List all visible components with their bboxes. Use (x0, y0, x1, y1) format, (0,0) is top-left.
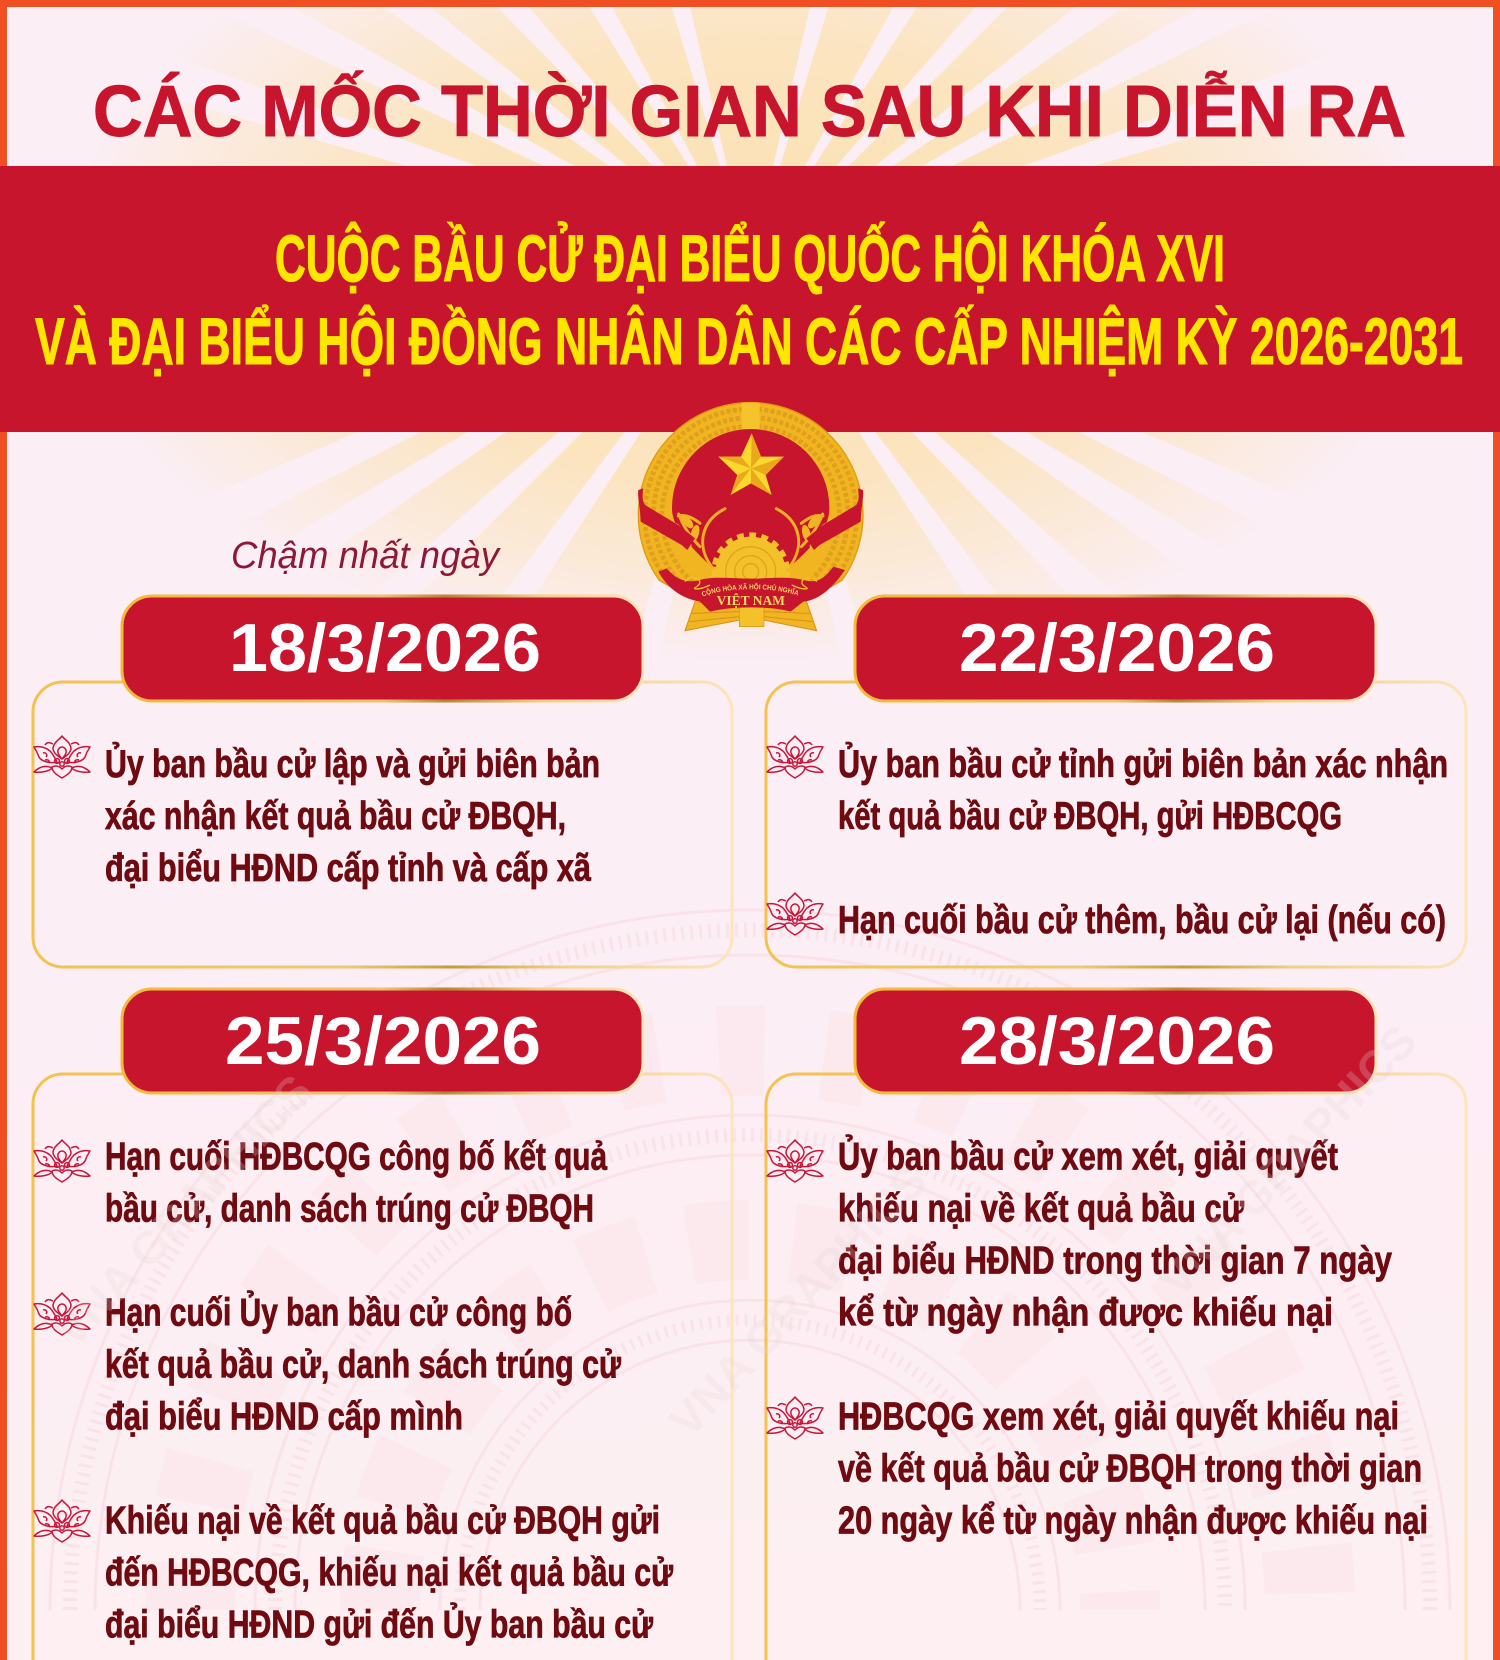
item text: kết quả bầu cử, danh sách trúng cử (105, 1344, 622, 1386)
item text: đại biểu HĐND cấp mình (105, 1396, 463, 1438)
watermark text: VNA GRAPHICS (659, 1155, 937, 1447)
panel frame (33, 682, 732, 967)
item text: Hạn cuối Ủy ban bầu cử công bố (105, 1290, 572, 1334)
panel: 22/3/2026 (766, 596, 1466, 967)
item text (105, 1136, 607, 1230)
icon: lotus (34, 1293, 90, 1335)
date: 22/3/2026 (959, 610, 1275, 686)
item text (838, 1134, 1392, 1334)
date pill (855, 596, 1376, 701)
panel frame (766, 682, 1466, 967)
date: 25/3/2026 (225, 1003, 541, 1079)
item text: xác nhận kết quả bầu cử ĐBQH, (105, 795, 566, 838)
icon: national emblem (638, 402, 864, 632)
item text: đến HĐBCQG, khiếu nại kết quả bầu cử (105, 1552, 674, 1594)
item text: kết quả bầu cử ĐBQH, gửi HĐBCQG (838, 795, 1342, 838)
item text (838, 742, 1448, 838)
date: 28/3/2026 (959, 1003, 1275, 1079)
panel: 18/3/2026 (33, 596, 732, 967)
sunburst background (0, 0, 1500, 1142)
item text (105, 1290, 622, 1438)
item text: Khiếu nại về kết quả bầu cử ĐBQH gửi (105, 1500, 660, 1542)
date pill (122, 989, 643, 1093)
item text: Ủy ban bầu cử lập và gửi biên bản (105, 742, 600, 786)
item text: đại biểu HĐND gửi đến Ủy ban bầu cử (105, 1602, 654, 1646)
red banner with subtitle (0, 166, 1500, 432)
icon: lotus (767, 893, 823, 935)
watermark: bronze drum pattern (50, 910, 1450, 1610)
watermark text (44, 1015, 1427, 1447)
item text (105, 1500, 674, 1646)
icon: lotus (34, 1140, 90, 1182)
item text: Hạn cuối HĐBCQG công bố kết quả (105, 1136, 607, 1178)
icon: lotus (34, 736, 90, 778)
title: CÁC MỐC THỜI GIAN SAU KHI DIỄN RA (93, 70, 1406, 152)
date: 18/3/2026 (229, 610, 541, 686)
panel frame (766, 1074, 1466, 1660)
icon: lotus (767, 1140, 823, 1182)
panel: 25/3/2026 (33, 989, 732, 1660)
icon: lotus (34, 1500, 90, 1542)
date pill (855, 989, 1376, 1093)
item text: Ủy ban bầu cử xem xét, giải quyết (838, 1134, 1338, 1178)
watermark text: VNA GRAPHICS (44, 1065, 322, 1357)
item text: khiếu nại về kết quả bầu cử (838, 1188, 1245, 1230)
item text: bầu cử, danh sách trúng cử ĐBQH (105, 1188, 594, 1230)
watermark text: VNA GRAPHICS (1149, 1015, 1427, 1307)
item text: kể từ ngày nhận được khiếu nại (838, 1292, 1333, 1334)
date pill (122, 596, 643, 701)
item text: đại biểu HĐND cấp tỉnh và cấp xã (105, 847, 591, 890)
item text (838, 1396, 1428, 1542)
icon: national emblem: VIỆT NAM (717, 592, 785, 609)
panel frame (33, 1074, 732, 1660)
icon: lotus (767, 736, 823, 778)
label: Chậm nhất ngày: Chậm nhất ngày (231, 535, 501, 577)
panel: 28/3/2026 (766, 989, 1466, 1660)
icon: lotus (767, 1397, 823, 1439)
icon: national emblem: CỘNG HÒA XÃ HỘI CHỦ NGHĨA (702, 582, 798, 596)
item text (105, 742, 600, 890)
